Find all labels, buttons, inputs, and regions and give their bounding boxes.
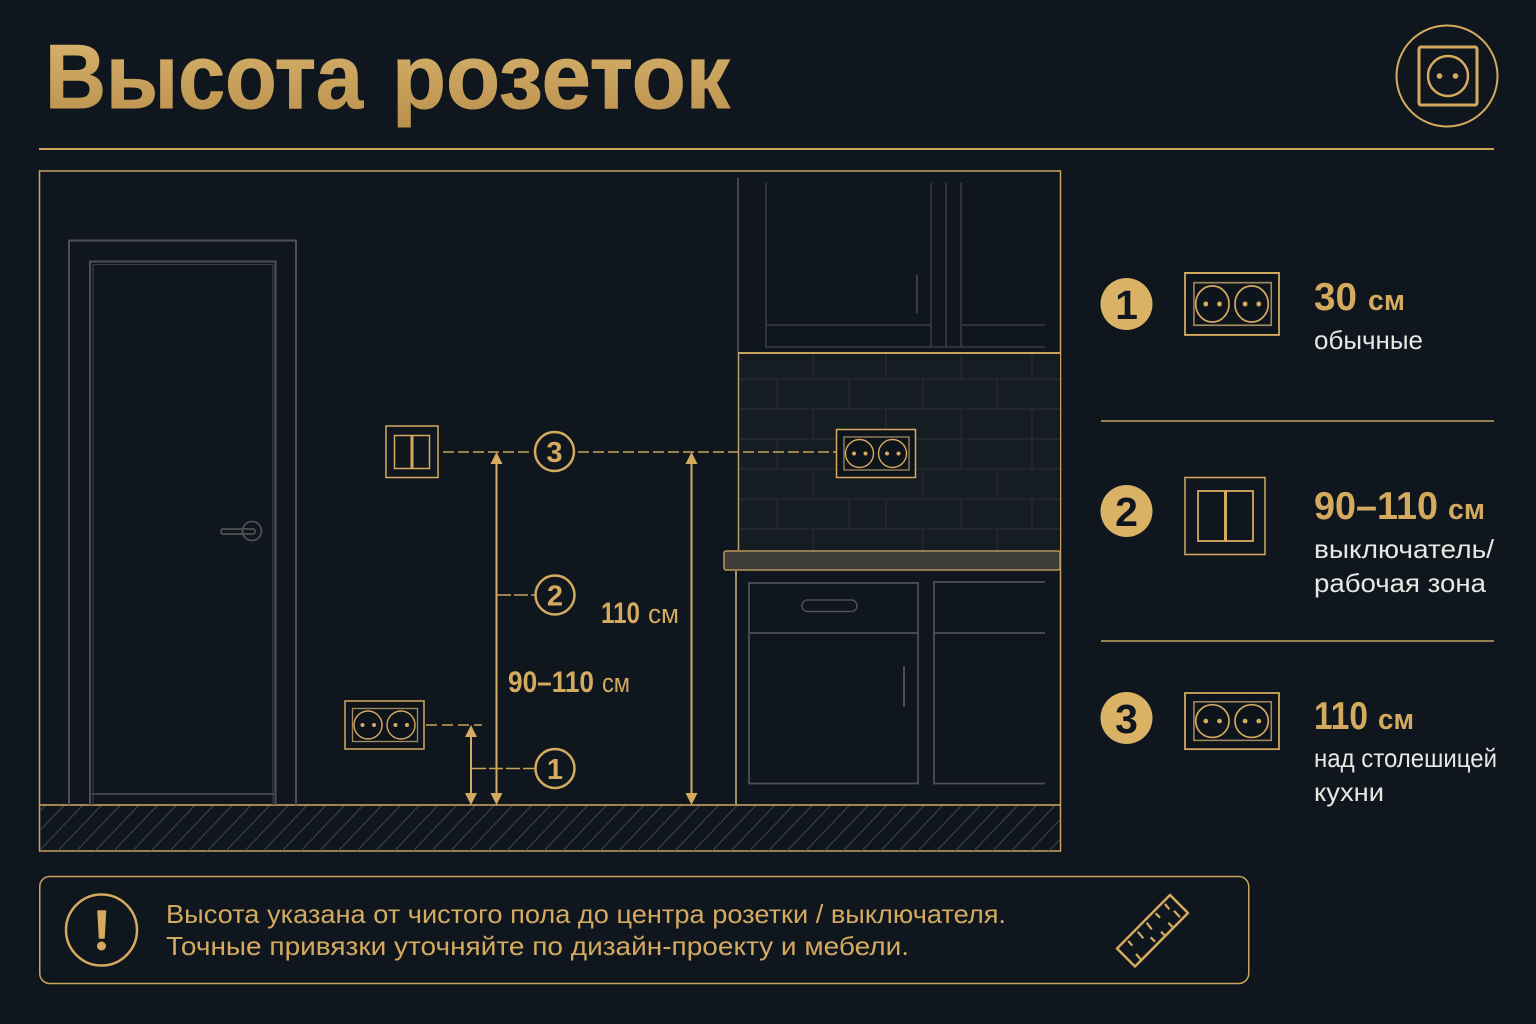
title: розеток — [392, 27, 730, 128]
marker 1 — [536, 749, 574, 788]
legend row 3 — [1100, 692, 1497, 807]
dimension line 3 dashed — [443, 451, 836, 453]
dashed leader to socket 1 — [426, 724, 482, 726]
socket on tile — [836, 430, 916, 478]
marker 3: 3 — [546, 437, 563, 469]
description: выключатель/ — [1314, 534, 1495, 564]
icon: warning — [66, 894, 137, 966]
badge 1: 1 — [1115, 282, 1138, 328]
badge 2: 2 — [1115, 489, 1138, 535]
note text: Точные привязки уточняйте по дизайн-проекту и мебели. — [166, 931, 909, 961]
arrow 90-110 cm — [490, 452, 502, 805]
marker 2 — [536, 576, 574, 614]
icon: double socket — [1185, 693, 1279, 749]
lower kitchen cabinets — [736, 571, 1045, 805]
description: обычные — [1314, 325, 1423, 355]
value 110 cm: 110 — [1314, 695, 1368, 738]
arrow 30 cm — [465, 725, 477, 805]
upper kitchen cabinets — [738, 178, 1045, 353]
note text: Высота указана от чистого пола до центра розетки / выключателя. — [166, 899, 1006, 929]
badge 3: 3 — [1115, 696, 1138, 742]
value 90-110 cm: см — [1448, 494, 1485, 526]
label 110 cm: см — [648, 599, 679, 629]
icon: switch — [1185, 478, 1265, 554]
marker 2: 2 — [547, 580, 563, 612]
arrow 110 cm — [686, 452, 698, 805]
description: рабочая зона — [1314, 568, 1487, 598]
socket near floor — [345, 701, 424, 749]
tile backsplash — [738, 353, 1060, 550]
marker 3 — [535, 432, 574, 471]
badge 3 — [1100, 692, 1152, 744]
title: Высота — [45, 27, 364, 128]
value 110 cm: см — [1378, 704, 1414, 736]
badge 1 — [1100, 278, 1152, 330]
icon: double socket — [1185, 273, 1279, 335]
panel: note — [40, 876, 1249, 984]
description: над столешицей — [1314, 743, 1497, 773]
marker 1: 1 — [547, 754, 563, 786]
value 30 cm: см — [1368, 285, 1405, 317]
description: кухни — [1314, 777, 1384, 807]
label 90-110 cm: см — [602, 668, 630, 698]
icon: ruler — [1117, 895, 1188, 966]
door handle — [221, 522, 262, 540]
panel: wall elevation drawing — [39, 171, 1060, 851]
callout leaders — [472, 595, 535, 768]
label 90-110 cm: 90–110 — [508, 666, 594, 699]
badge 2 — [1100, 485, 1152, 537]
value 30 cm: 30 — [1314, 276, 1357, 319]
floor hatch — [39, 805, 1060, 851]
countertop — [724, 551, 1060, 570]
legend row 1 — [1100, 273, 1423, 355]
door — [69, 240, 296, 805]
icon: socket in circle — [1396, 26, 1498, 126]
label 110 cm: 110 — [601, 597, 640, 630]
legend row 2 — [1100, 478, 1495, 598]
value 90-110 cm: 90–110 — [1314, 485, 1438, 528]
switch on wall — [386, 426, 438, 478]
